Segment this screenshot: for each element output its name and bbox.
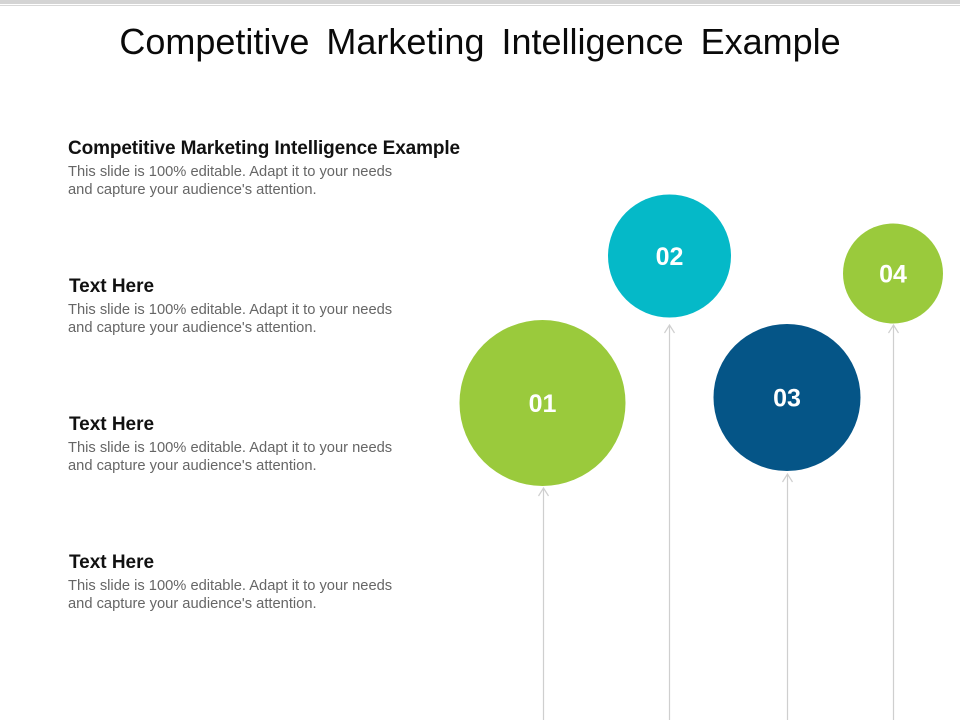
arrow: 01 (538, 488, 548, 720)
text block: item 2 (68, 276, 392, 336)
circle 02 (608, 194, 731, 318)
circle 01 (460, 320, 626, 486)
text block: item 4: Text Here (69, 552, 154, 573)
text block: intro: Competitive Marketing Intelligence Example (68, 138, 460, 159)
text block: item 2: and capture your audience's attention. (68, 320, 317, 336)
text block: item 4: This slide is 100% editable. Adapt it to your needs (68, 578, 392, 594)
text block: intro (68, 138, 460, 198)
circle 02: 02 (656, 243, 683, 271)
text block: item 3 (68, 414, 392, 474)
text block: item 2: This slide is 100% editable. Adapt it to your needs (68, 302, 392, 318)
circle 04: 04 (879, 260, 907, 288)
text block: intro: and capture your audience's attention. (68, 182, 317, 198)
title: Competitive Marketing Intelligence Example (119, 21, 841, 62)
text block: intro: This slide is 100% editable. Adapt it to your needs (68, 164, 392, 180)
arrow: 04 (888, 325, 898, 720)
arrow: 02 (664, 325, 674, 720)
text block: item 3: This slide is 100% editable. Adapt it to your needs (68, 440, 392, 456)
circle 01: 01 (529, 390, 556, 418)
circle 03: 03 (773, 384, 801, 412)
circle 03 (714, 324, 860, 471)
text block: item 4 (68, 552, 392, 612)
text block: item 3: Text Here (69, 414, 154, 435)
circle 04 (843, 224, 943, 324)
text block: item 4: and capture your audience's attention. (68, 596, 317, 612)
text block: item 3: and capture your audience's attention. (68, 458, 317, 474)
text block: item 2: Text Here (69, 276, 154, 297)
arrow: 03 (782, 474, 792, 720)
